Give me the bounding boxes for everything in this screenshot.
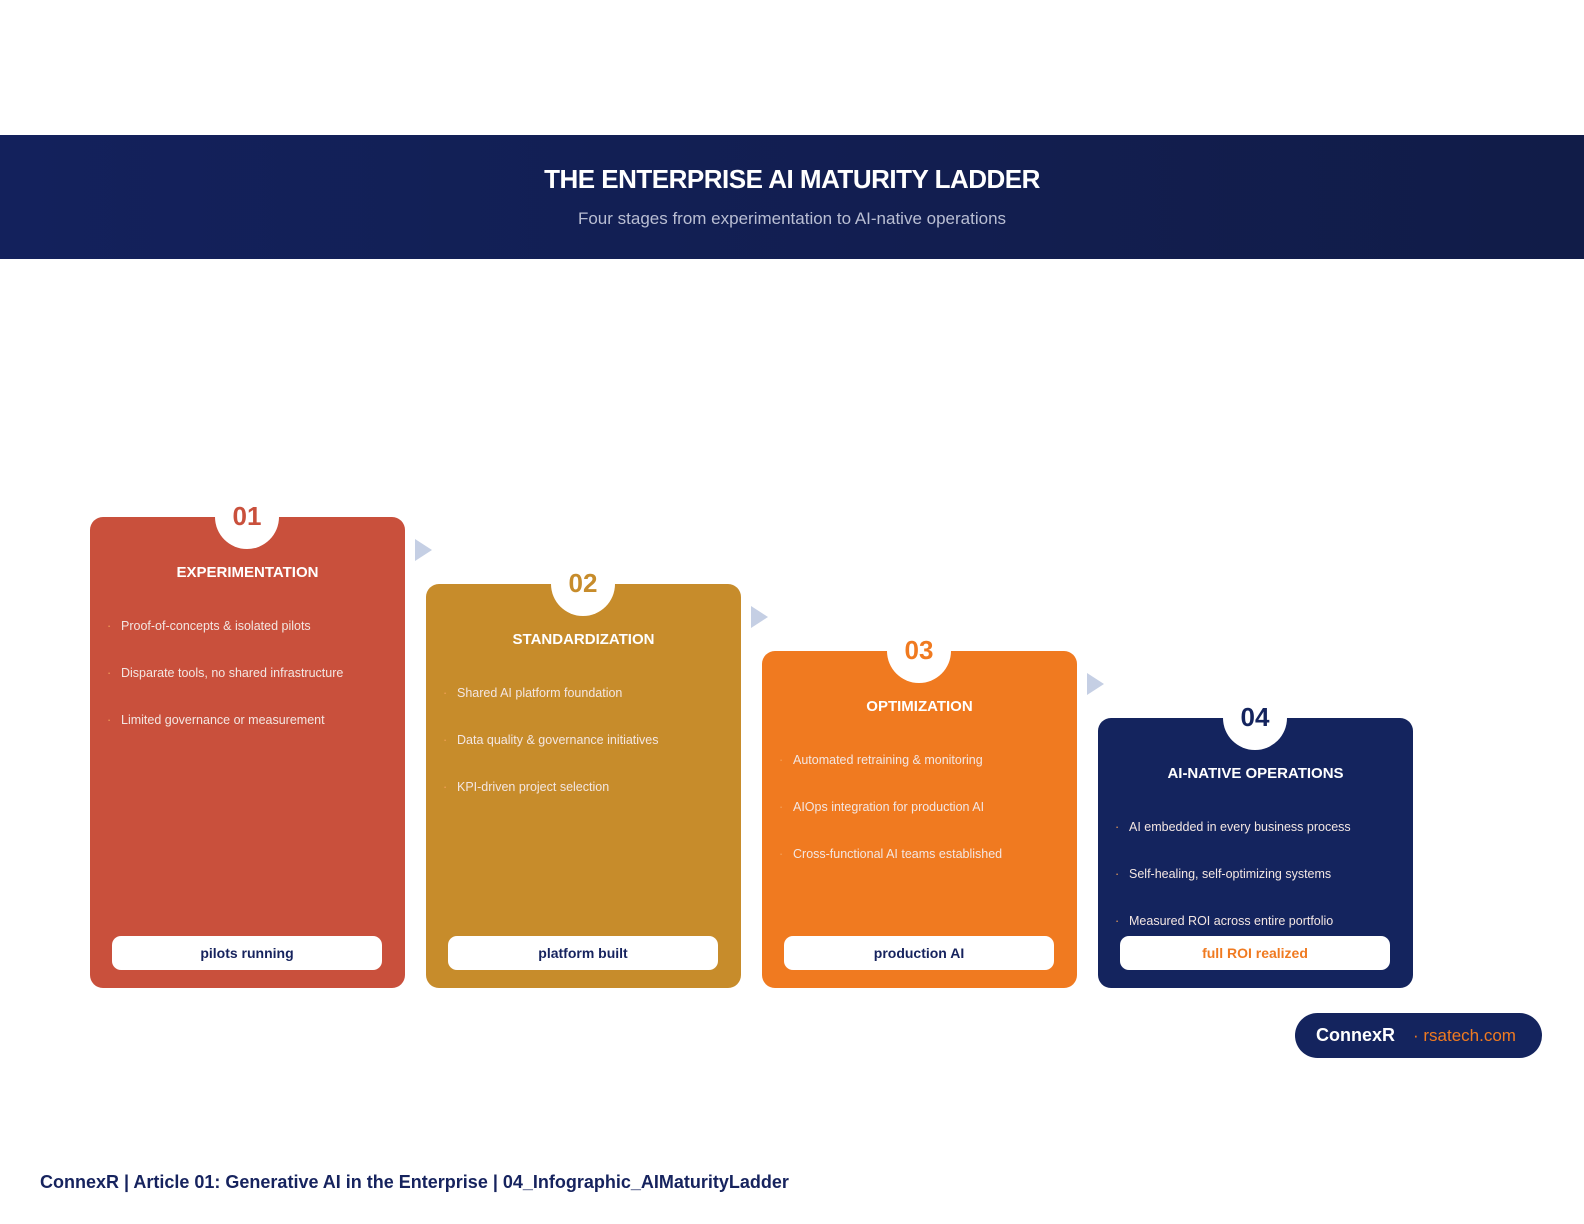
outcome pill: production AI [874, 945, 964, 961]
bullet: Proof-of-concepts & isolated pilots [121, 619, 311, 633]
number badge 01: 01 [233, 501, 261, 531]
arrow [1087, 673, 1104, 695]
outcome pill: platform built [538, 945, 628, 961]
bullet: Cross-functional AI teams established [793, 847, 1002, 861]
bullet: Disparate tools, no shared infrastructure [121, 666, 343, 680]
bullet: Shared AI platform foundation [457, 686, 622, 700]
number badge 02: 02 [569, 568, 597, 598]
card 2: standardization [426, 584, 741, 988]
number badge 02 [551, 552, 615, 616]
outcome pill: full ROI realized [1202, 945, 1308, 961]
card title: OPTIMIZATION [866, 698, 973, 715]
bullet: Limited governance or measurement [121, 713, 325, 727]
card title: STANDARDIZATION [513, 631, 654, 648]
number badge 01 [215, 485, 279, 549]
outcome pill [448, 936, 718, 970]
title: THE ENTERPRISE AI MATURITY LADDER [544, 164, 1040, 194]
number badge 03 [887, 619, 951, 683]
card title: AI-NATIVE OPERATIONS [1167, 765, 1344, 782]
outcome pill: pilots running [200, 945, 294, 961]
bullet: KPI-driven project selection [457, 780, 609, 794]
bullet: Measured ROI across entire portfolio [1129, 914, 1333, 928]
card 1: experimentation [90, 517, 405, 988]
arrow [415, 539, 432, 561]
card title: EXPERIMENTATION [177, 564, 318, 581]
bullet: Self-healing, self-optimizing systems [1129, 867, 1331, 881]
bullet: Data quality & governance initiatives [457, 733, 659, 747]
bullet: AIOps integration for production AI [793, 800, 984, 814]
number badge 04 [1223, 686, 1287, 750]
number badge 03: 03 [905, 635, 933, 665]
brand badge: ConnexR [1316, 1025, 1395, 1045]
arrow [751, 606, 768, 628]
footer caption: ConnexR | Article 01: Generative AI in the Enterprise | 04_Infographic_AIMaturityLadder [40, 1172, 789, 1192]
brand badge [1295, 1013, 1542, 1058]
number badge 04: 04 [1241, 702, 1269, 732]
card 3: optimization [762, 651, 1077, 988]
brand badge: · rsatech.com [1413, 1026, 1516, 1045]
outcome pill [1120, 936, 1390, 970]
card 4: AI-native operations [1098, 718, 1413, 988]
subtitle: Four stages from experimentation to AI-native operations [578, 209, 1006, 228]
outcome pill [112, 936, 382, 970]
outcome pill [784, 936, 1054, 970]
header band [0, 135, 1584, 259]
bullet: Automated retraining & monitoring [793, 753, 983, 767]
bullet: AI embedded in every business process [1129, 820, 1351, 834]
